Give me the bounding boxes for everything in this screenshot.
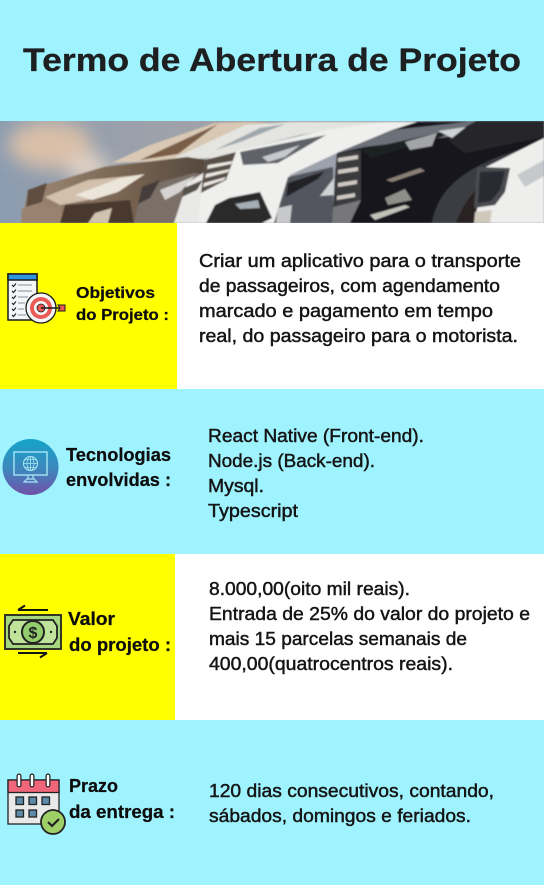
photo: row of parked cars [0,121,544,223]
white car [198,122,417,223]
right white car [474,138,544,223]
label: prazo da entrega [69,776,175,822]
text: tecnologias list: Node.js (Back-end). [208,451,375,471]
text: prazo description [209,781,494,826]
silver car [173,172,204,223]
black car [332,121,544,223]
text: tecnologias list: React Native (Front-end). [208,426,424,446]
text: objetivos description [199,251,521,346]
label: objetivos do projeto: do Projeto : [76,307,169,324]
panel: valor label [0,554,175,720]
icon: computer with globe [2,439,58,495]
label: prazo da entrega: da entrega : [69,802,175,822]
panel: prazo band [0,720,544,885]
panel: tecnologias band [0,389,544,554]
panel: valor description [175,554,544,720]
text: valor description: Entrada de 25% do valor do projeto e [209,604,530,624]
text: valor description [209,579,530,674]
dark grey car [274,167,333,223]
panel: objetivos description [177,223,544,389]
text: objetivos description: marcado e pagamento em tempo [199,301,493,321]
text: objetivos description: de passageiros, com agendamento [199,276,500,296]
panel: objetivos label [0,223,177,389]
text: objetivos description: real, do passageiro para o motorista. [199,326,518,346]
brown cars [21,157,208,223]
grey car [134,173,205,223]
text: tecnologias list: Typescript [208,501,298,521]
icon: checklist with target [8,274,65,323]
text: prazo description: sábados, domingos e feriados. [209,806,471,826]
text: tecnologias list: Mysql. [208,476,264,496]
label: objetivos do projeto [76,285,169,324]
icon: banknote with arrows [5,606,61,658]
label: objetivos do projeto: Objetivos [76,285,155,302]
label: prazo da entrega: Prazo [69,776,118,796]
label: valor do projeto: Valor [68,609,115,629]
text: tecnologias list [208,426,424,521]
label: valor do projeto: do projeto : [69,635,171,655]
icon: banknote with arrows: $ [29,625,38,642]
far windshields [111,122,270,163]
label: tecnologias envolvidas [66,445,171,490]
text: valor description: mais 15 parcelas semanais de [209,629,467,649]
title: Termo de Abertura de Projeto [23,42,521,78]
text: valor description: 400,00(quatrocentros reais). [209,654,453,674]
label: tecnologias envolvidas: Tecnologias [66,445,171,465]
label: tecnologias envolvidas: envolvidas : [66,470,171,490]
icon: calendar with check [8,776,65,834]
text: valor description: 8.000,00(oito mil reais). [209,579,410,599]
text: objetivos description: Criar um aplicativo para o transporte [199,251,521,271]
label: valor do projeto [68,609,171,655]
text: prazo description: 120 dias consecutivos, contando, [209,781,494,801]
